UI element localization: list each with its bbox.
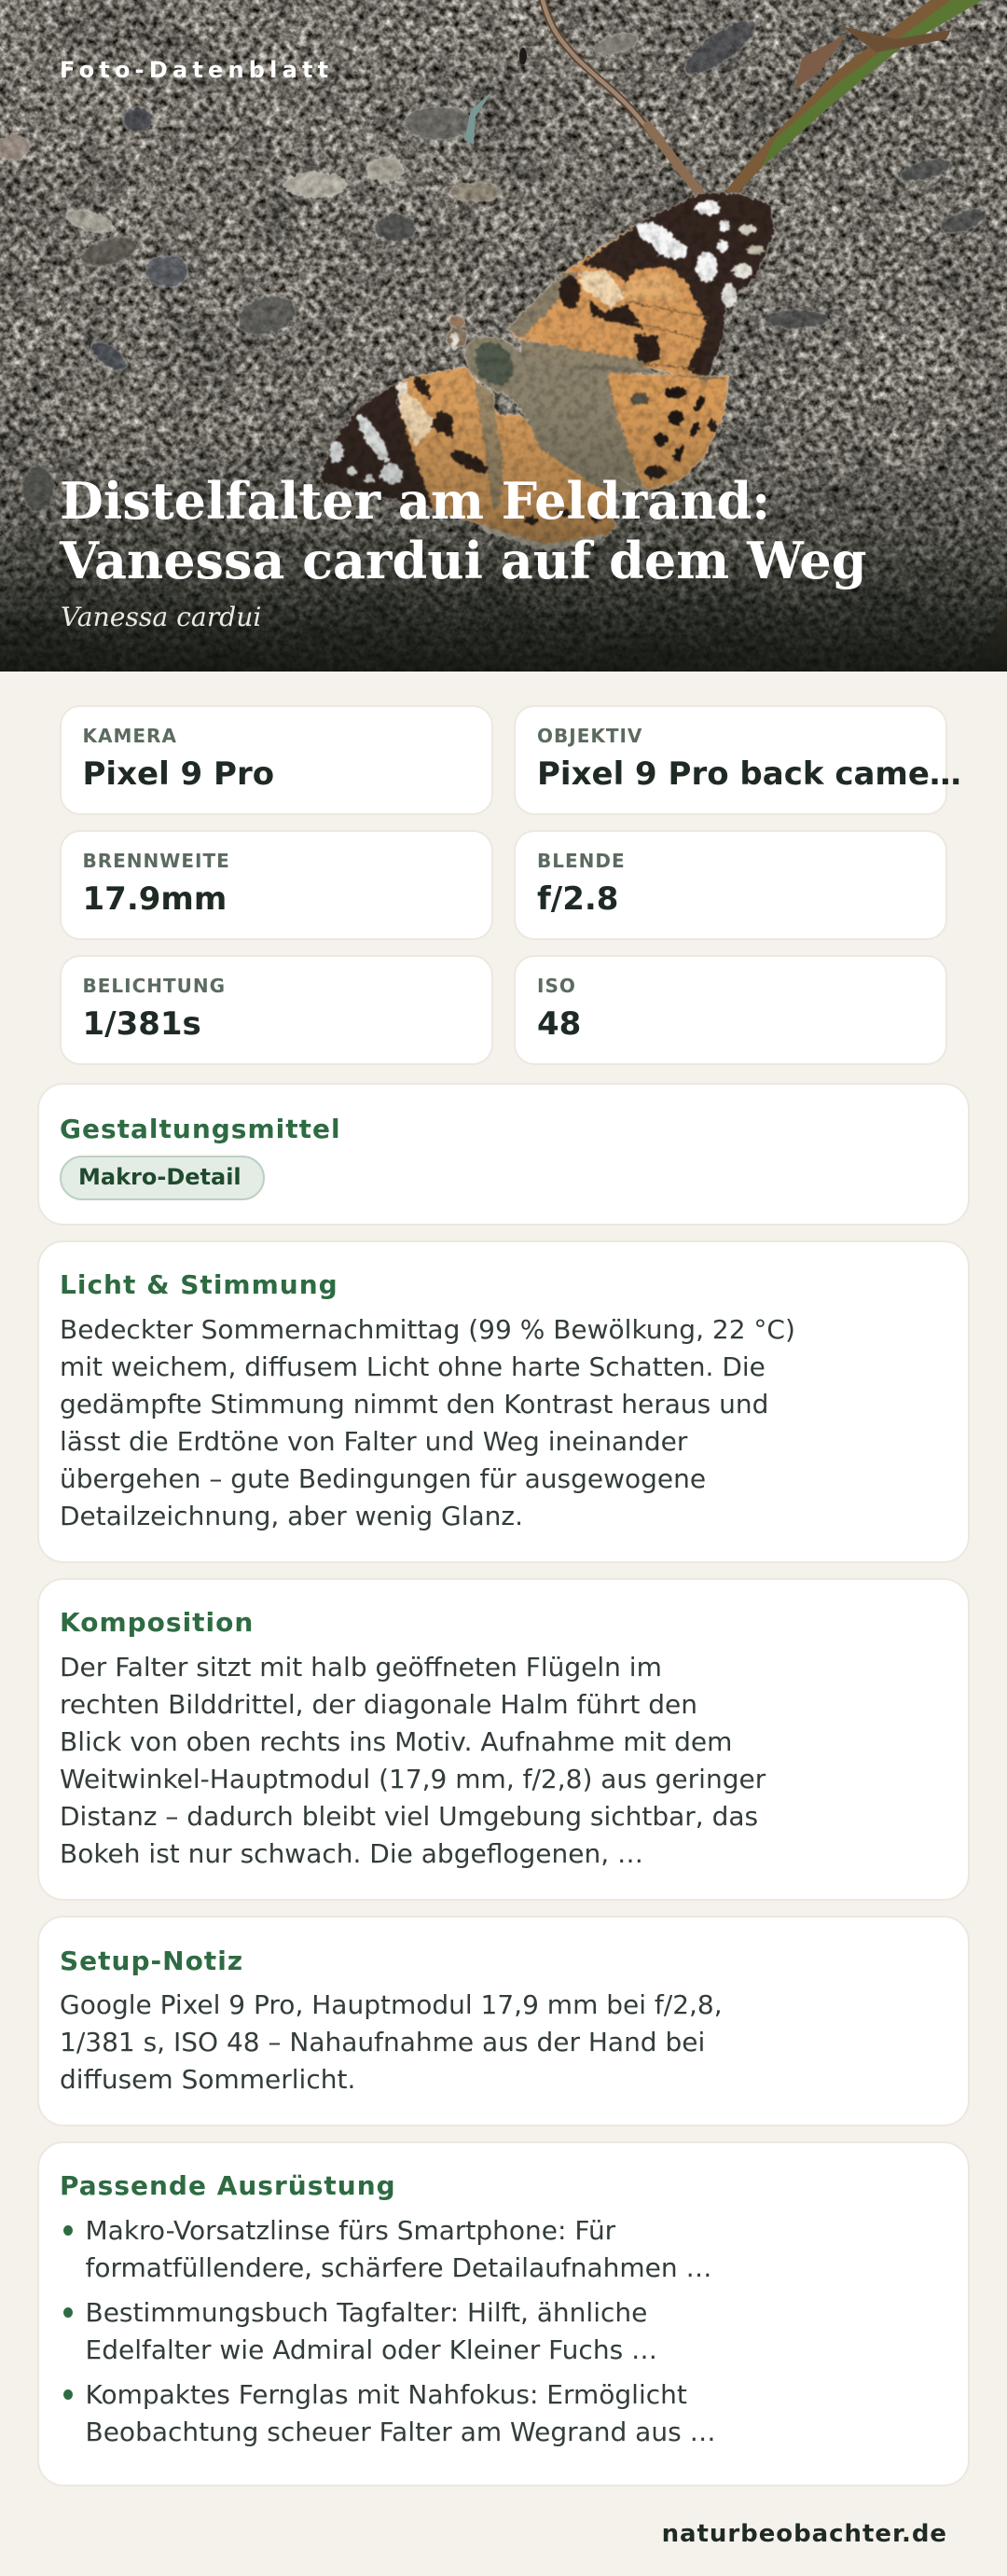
footer brand: naturbeobachter.de <box>662 2520 947 2548</box>
hero title: Distelfalter am Feldrand: <box>60 471 770 531</box>
list item: Fernglas <box>63 2379 716 2447</box>
right forewing <box>506 193 774 382</box>
green grass stalk <box>725 0 983 193</box>
list item: Makro-Vorsatzlinse <box>63 2215 712 2283</box>
body text: Komposition: Weitwinkel-Hauptmodul (17,9 mm, f/2,8) aus geringer <box>60 1764 766 1794</box>
stat card: Kamera: Pixel 9 Pro <box>82 755 274 793</box>
chip: Makro-Detail <box>60 1156 265 1200</box>
heading: Gestaltungsmittel: Gestaltungsmittel <box>60 1114 341 1144</box>
bullet <box>63 2307 73 2318</box>
hero title <box>60 471 866 590</box>
heading: Komposition: Komposition <box>60 1607 254 1638</box>
stat card: Belichtung: 1/381s <box>82 1005 201 1043</box>
body and thorax <box>447 316 544 508</box>
heading: Licht & Stimmung: Licht & Stimmung <box>60 1269 338 1300</box>
list item: Bestimmungsbuch: Bestimmungsbuch Tagfalter: Hilft, ähnliche <box>86 2297 647 2328</box>
bullet <box>63 2225 73 2236</box>
stat card: Blende: f/2.8 <box>537 880 618 918</box>
stat card: Brennweite <box>60 830 493 940</box>
dark gradient overlay <box>0 0 1007 672</box>
body text: Licht & Stimmung: mit weichem, diffusem Licht ohne harte Schatten. Die <box>60 1351 766 1382</box>
bullet <box>63 2389 73 2400</box>
hero eyebrow label: Foto-Datenblatt <box>60 57 333 83</box>
stat card: Belichtung: BELICHTUNG <box>82 975 226 997</box>
left forewing <box>320 367 639 550</box>
list item: Makro-Vorsatzlinse: Makro-Vorsatzlinse fürs Smartphone: Für <box>86 2215 615 2246</box>
stat card: Kamera: KAMERA <box>82 725 177 747</box>
hero photo: butterfly on gravel path <box>0 0 1007 672</box>
stat card: Brennweite: 17.9mm <box>82 880 227 918</box>
stat card: ISO <box>514 955 947 1065</box>
hero subtitle: species name: Vanessa cardui <box>61 602 261 632</box>
panel: Gestaltungsmittel <box>37 1083 970 1226</box>
body text: Setup-Notiz: diffusem Sommerlicht. <box>60 2064 355 2095</box>
stat card: Objektiv: OBJEKTIV <box>537 725 642 747</box>
stat card: Blende: BLENDE <box>537 850 626 872</box>
right hindwing <box>494 359 729 491</box>
body text: Licht & Stimmung: Bedeckter Sommernachmittag (99 % Bewölkung, 22 °C) <box>60 1314 795 1345</box>
body text: Setup-Notiz: 1/381 s, ISO 48 – Nahaufnahme aus der Hand bei <box>60 2027 705 2057</box>
list item: Fernglas: Kompaktes Fernglas mit Nahfokus: Ermöglicht <box>86 2379 687 2410</box>
stat card: Blende <box>514 830 947 940</box>
list item: Makro-Vorsatzlinse: formatfüllendere, schärfere Detailaufnahmen … <box>86 2252 712 2283</box>
heading: Passende Ausrüstung: Passende Ausrüstung <box>60 2170 396 2201</box>
panel: Setup-Notiz <box>37 1916 970 2126</box>
body text: Licht & Stimmung: gedämpfte Stimmung nimmt den Kontrast heraus und <box>60 1389 768 1420</box>
stat card: Objektiv <box>514 705 947 815</box>
stat card: ISO: ISO <box>537 975 576 997</box>
gravel texture <box>0 0 1007 672</box>
stat card: ISO: 48 <box>537 1005 581 1043</box>
body text: Setup-Notiz: Google Pixel 9 Pro, Hauptmodul 17,9 mm bei f/2,8, <box>60 1989 723 2020</box>
stat card: Kamera <box>60 705 493 815</box>
body text: Setup-Notiz <box>60 1989 723 2095</box>
body text: Komposition: Bokeh ist nur schwach. Die abgeflogenen, … <box>60 1838 643 1869</box>
list item: Bestimmungsbuch: Edelfalter wie Admiral oder Kleiner Fuchs … <box>86 2334 657 2365</box>
heading: Setup-Notiz: Setup-Notiz <box>60 1946 243 1976</box>
panel: Passende Ausrüstung <box>37 2141 970 2486</box>
panel: Komposition <box>37 1578 970 1901</box>
butterfly <box>320 193 774 550</box>
body text: Komposition <box>60 1652 766 1869</box>
chip: Makro-Detail: Makro-Detail <box>78 1164 241 1190</box>
stat card: Objektiv: Pixel 9 Pro back came… <box>537 755 961 793</box>
panel: Licht & Stimmung <box>37 1240 970 1563</box>
stat card: Belichtung <box>60 955 493 1065</box>
list item: Bestimmungsbuch <box>63 2297 657 2365</box>
body text: Komposition: Distanz – dadurch bleibt viel Umgebung sichtbar, das <box>60 1801 758 1832</box>
body text: Licht & Stimmung <box>60 1314 795 1531</box>
dry grass blade <box>543 0 699 192</box>
body text: Licht & Stimmung: Detailzeichnung, aber wenig Glanz. <box>60 1501 523 1531</box>
body text: Licht & Stimmung: lässt die Erdtöne von Falter und Weg ineinander <box>60 1426 687 1457</box>
small pebble: teal sliver <box>464 48 527 145</box>
dead leaves <box>794 26 1007 672</box>
stones <box>0 12 989 511</box>
body text: Komposition: Blick von oben rechts ins Motiv. Aufnahme mit dem <box>60 1726 732 1757</box>
body text: Licht & Stimmung: übergehen – gute Bedingungen für ausgewogene <box>60 1463 706 1494</box>
body text: Komposition: Der Falter sitzt mit halb geöffneten Flügeln im <box>60 1652 662 1683</box>
hero title: Vanessa cardui auf dem Weg <box>60 531 866 590</box>
list item: Fernglas: Beobachtung scheuer Falter am Wegrand aus … <box>86 2417 716 2447</box>
body text: Komposition: rechten Bilddrittel, der diagonale Halm führt den <box>60 1689 697 1720</box>
stat card: Brennweite: BRENNWEITE <box>82 850 230 872</box>
